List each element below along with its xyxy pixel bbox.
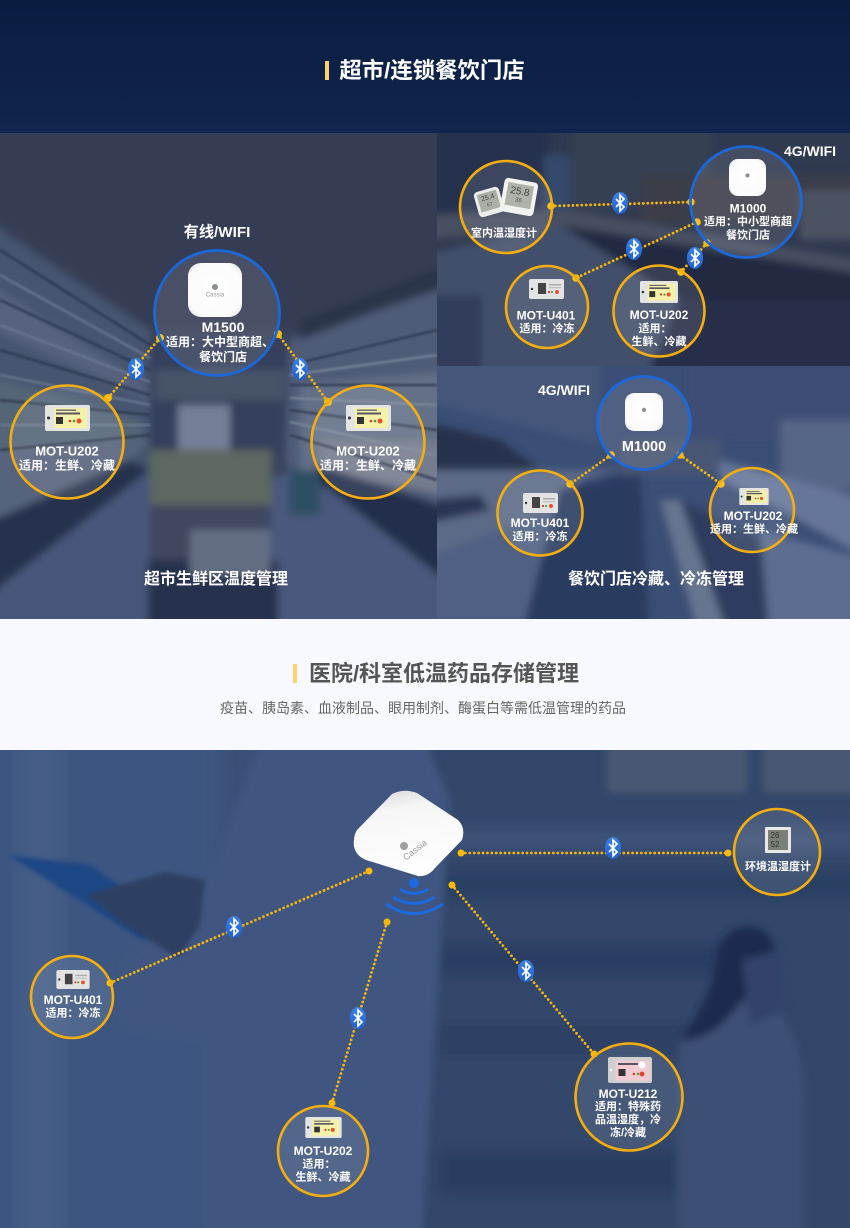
sensor MOT-U202 <box>710 468 798 552</box>
sensor MOT-U202 <box>278 1106 368 1196</box>
indoor hygrometer: 67 <box>486 201 494 209</box>
ambient hygrometer: 26 <box>771 831 780 840</box>
sensor MOT-U401 <box>31 956 113 1038</box>
sensor MOT-U212: 冻/冷藏 <box>610 1125 646 1139</box>
caption: supermarket: 超市生鲜区温度管理 <box>144 569 288 588</box>
connector: hygrometer to gateway <box>458 837 732 859</box>
section band: medical storage <box>0 619 850 750</box>
header band <box>0 0 850 133</box>
photo: supermarket aisle <box>0 133 437 619</box>
gateway M1500 <box>154 250 280 376</box>
gateway M1500: M1500 <box>202 319 245 335</box>
sensor MOT-U212: MOT-U212 <box>599 1087 658 1101</box>
gateway M1000 <box>598 376 690 470</box>
sensor MOT-U202 left: 适用：生鲜、冷藏 <box>19 458 115 472</box>
gateway M1500: 适用：大中型商超、 <box>166 334 274 349</box>
label: 4G/WIFI: 4G/WIFI <box>784 143 836 159</box>
panel: restaurant kitchen <box>437 366 850 619</box>
sensor MOT-U401 <box>506 266 588 348</box>
indoor hygrometer: 25.8 <box>509 185 531 199</box>
gateway M1000: M1000 <box>730 202 767 216</box>
connector: U202 to gateway <box>328 918 390 1106</box>
sensor MOT-U401: MOT-U401 <box>44 993 103 1007</box>
gateway M1000: 餐饮门店 <box>726 228 770 242</box>
sensor MOT-U401: 适用：冷冻 <box>520 321 574 335</box>
sensor MOT-U401 <box>498 470 582 556</box>
sensor MOT-U202: MOT-U202 <box>724 509 783 523</box>
panel: supermarket fresh area <box>0 133 437 619</box>
sensor MOT-U202: 生鲜、冷藏 <box>632 334 686 348</box>
connector: left sensor to M1500 <box>104 334 164 402</box>
connector: U401 to M1000 <box>566 451 615 488</box>
sensor MOT-U212: 品温湿度，冷 <box>595 1112 661 1126</box>
gateway device <box>354 791 463 876</box>
connector: U212 to gateway <box>448 882 598 1058</box>
heading: hospital and lab: 医院/科室低温药品存储管理 <box>309 661 579 686</box>
sensor MOT-U202 <box>614 266 704 356</box>
sensor MOT-U202 right: 适用：生鲜、冷藏 <box>320 458 416 472</box>
photo: pharmacist with clipboard <box>0 730 850 1228</box>
ambient hygrometer: 52 <box>771 840 780 849</box>
sensor MOT-U202: MOT-U202 <box>630 308 689 322</box>
connector: hygrometer to M1000 <box>547 192 695 214</box>
sensor MOT-U202: 适用： <box>302 1158 336 1170</box>
photo: restaurant interior <box>437 133 850 366</box>
sensor MOT-U202 right <box>312 386 424 498</box>
label: wired / WIFI: 有线/WIFI <box>184 223 250 241</box>
ambient hygrometer: 环境温湿度计 <box>745 859 811 873</box>
sensor MOT-U202: MOT-U202 <box>294 1144 353 1158</box>
gateway M1500: 餐饮门店 <box>199 349 247 364</box>
panel: restaurant dining area <box>437 133 850 366</box>
sensor MOT-U202: 适用： <box>638 322 672 335</box>
sensor MOT-U202: 生鲜、冷藏 <box>296 1170 350 1184</box>
caption: restaurant kitchen: 餐饮门店冷藏、冷冻管理 <box>568 569 744 588</box>
label: 4G/WIFI: 4G/WIFI <box>538 382 590 398</box>
photo: commercial kitchen <box>437 366 850 619</box>
gateway M1000 <box>690 146 802 258</box>
connector: U401 to gateway <box>106 868 372 986</box>
sensor MOT-U202: 适用：生鲜、冷藏 <box>710 522 798 536</box>
sensor MOT-U401: MOT-U401 <box>517 308 576 322</box>
indoor hygrometer: 25.4 <box>480 193 496 203</box>
gateway M1000: M1000 <box>622 439 666 455</box>
heading: supermarket and chain restaurants: 超市/连锁餐饮门店 <box>339 57 525 83</box>
indoor hygrometer <box>460 161 552 253</box>
sensor MOT-U401: 适用：冷冻 <box>512 529 568 543</box>
connector: U202 to M1000 <box>676 451 725 488</box>
sensor MOT-U212: 适用：特殊药 <box>595 1099 661 1113</box>
connector: U202 to M1000 <box>677 239 711 276</box>
sensor MOT-U212 <box>576 1044 682 1150</box>
ambient hygrometer <box>734 809 820 895</box>
gateway M1500: Cassia <box>206 292 225 298</box>
indoor hygrometer: 36 <box>514 197 523 205</box>
sensor MOT-U202 right: MOT-U202 <box>336 444 400 458</box>
icon: wireless signal <box>386 878 443 914</box>
sensor MOT-U401: MOT-U401 <box>511 516 570 530</box>
connector: right sensor to M1500 <box>274 330 332 406</box>
sensor MOT-U202 left <box>10 386 124 498</box>
gateway M1000: 适用：中小型商超 <box>704 214 792 228</box>
sensor MOT-U401: 适用：冷冻 <box>46 1006 100 1020</box>
subtitle: drugs list: 疫苗、胰岛素、血液制品、眼用制剂、酶蛋白等需低温管理的药品 <box>220 700 626 716</box>
connector: U401 to M1000 <box>572 218 701 282</box>
indoor hygrometer: 室内温湿度计 <box>471 226 537 240</box>
panel: pharmacy deployment <box>0 730 850 1228</box>
gateway device: Cassia <box>401 838 429 862</box>
sensor MOT-U202 left: MOT-U202 <box>35 444 99 458</box>
